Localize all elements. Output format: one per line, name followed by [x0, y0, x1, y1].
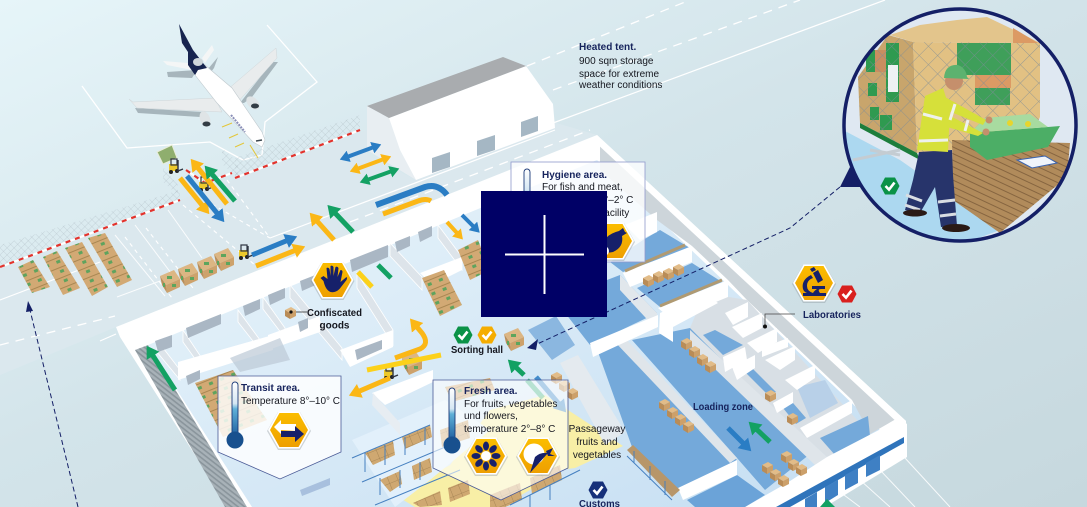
- worker: [903, 65, 992, 232]
- transit area text: [241, 383, 340, 407]
- yellow floor bands: [358, 265, 441, 370]
- customs label and badge: [579, 482, 620, 507]
- flow arrows: apron crossing: [180, 167, 235, 214]
- hygiene area text: For fish and meat,: [542, 182, 623, 193]
- sorting hall label and badges: [451, 326, 503, 356]
- front facade with blue stripe and doors: [750, 419, 907, 507]
- stock: boxes and racks: [195, 240, 807, 507]
- hygiene area text: Hygiene area.: [542, 170, 607, 181]
- heated tent caption: 900 sqm storage: [579, 56, 654, 67]
- laboratories label with microscope icon: [763, 264, 861, 328]
- hygiene area text: [542, 170, 633, 219]
- heated tent caption: weather conditions: [578, 80, 662, 91]
- cargo stack: [858, 17, 1040, 160]
- confiscated goods label: goods: [320, 320, 350, 332]
- passageway label: [569, 424, 625, 461]
- placeholder square with cross: [481, 191, 607, 317]
- pallets and forklift on apron: [18, 145, 253, 296]
- thermometer: hygiene: [518, 169, 536, 234]
- hand icon: confiscated goods: [310, 262, 354, 300]
- loading zone label: Loading zone: [693, 402, 753, 413]
- sorting hall label and badges: Sorting hall: [451, 345, 503, 356]
- dashed callout line to sorting hall: [527, 187, 840, 350]
- icon: flower: [464, 438, 508, 476]
- laboratories label with microscope icon: Laboratories: [803, 310, 861, 321]
- fresh area text: [464, 386, 557, 435]
- transit area text: Temperature 8°–10° C: [241, 396, 340, 407]
- panel: fresh area: [433, 380, 568, 500]
- airplane stand markings: [82, 25, 317, 160]
- warehouse shell: [116, 135, 907, 507]
- hygiene area text: Cold storage facility: [542, 208, 629, 219]
- confiscated goods label: [285, 307, 362, 332]
- icon: fruit and vegetable: [516, 438, 560, 476]
- trolley: [853, 150, 900, 160]
- heated tent caption: space for extreme: [579, 69, 659, 80]
- double-headed arrows to heated tent: [348, 147, 391, 180]
- dashed callout line to apron pallets: [26, 301, 78, 507]
- airplane: [129, 24, 278, 158]
- green crate: [970, 114, 1060, 160]
- green check badge: [880, 178, 900, 194]
- wooden pallets: [952, 140, 1070, 233]
- thermometer: transit: [226, 382, 244, 448]
- transit area text: Transit area.: [241, 383, 300, 394]
- fresh area text: und flowers,: [464, 411, 518, 422]
- interior walls and door rows: [155, 212, 852, 500]
- confiscated goods label: Confiscated: [307, 308, 362, 319]
- fresh area text: temperature 2°–8° C: [464, 424, 555, 435]
- heated tent caption: [578, 42, 662, 91]
- heated tent building: [367, 57, 555, 180]
- icon: poultry: [591, 222, 635, 261]
- curved routes into hygiene area: [376, 186, 474, 233]
- thermometer: fresh: [444, 388, 460, 454]
- fresh area text: Fresh area.: [464, 386, 518, 397]
- panel: transit area: [218, 376, 341, 479]
- fence: [0, 115, 360, 267]
- flow arrows: towards warehouse: [252, 213, 353, 266]
- inset circle: inspection of goods: [840, 9, 1076, 245]
- inset scene: [843, 17, 1070, 245]
- passageway label: fruits and: [576, 437, 618, 448]
- passageway label: Passageway: [569, 424, 625, 435]
- interior flow arrows: [152, 327, 770, 444]
- heated tent caption: Heated tent.: [579, 42, 636, 53]
- fresh area text: For fruits, vegetables: [464, 399, 557, 410]
- hygiene area text: temperature 0°–2° C: [542, 195, 633, 206]
- panel: hygiene area: [511, 162, 645, 262]
- passageway label: vegetables: [573, 450, 621, 461]
- icon: transit arrows: [267, 412, 311, 450]
